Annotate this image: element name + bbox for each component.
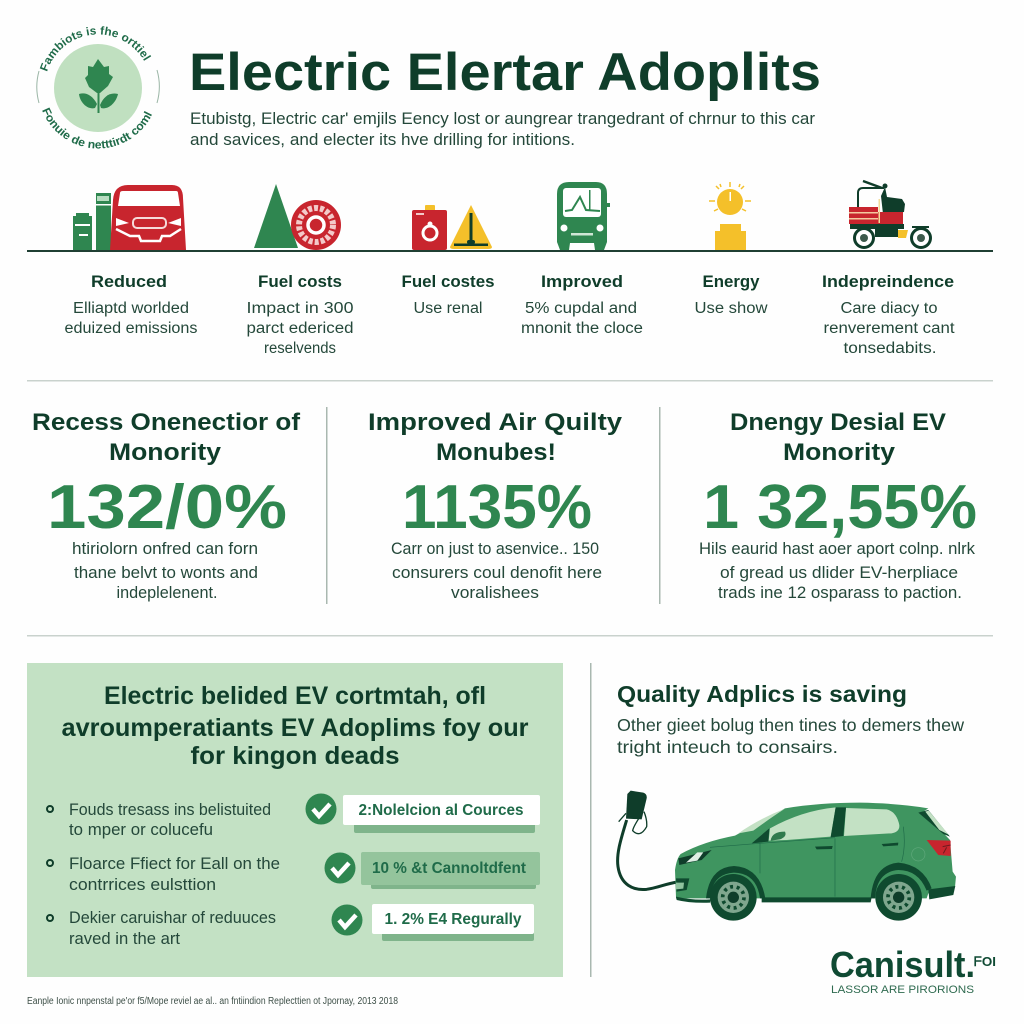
bullet list: raved in the art (69, 930, 180, 948)
car body (675, 803, 956, 898)
benefit: independence: Care diacy to (840, 300, 938, 317)
stat panel: improved air quality: consurers coul denofit here (392, 564, 602, 582)
logo badge: Fambiots is fhe orttiel (40, 26, 152, 72)
icon: green triangle and wheel (254, 184, 341, 250)
brand logo: LASSOR ARE PIRORIONS (831, 984, 974, 996)
panel: green checklist (27, 663, 563, 977)
bullet list: contrrices eulsttion (69, 876, 216, 894)
stat panel: recess (32, 409, 301, 602)
stat panel: energy desial: Monority (783, 439, 896, 466)
benefit: independence: renverement cant (824, 320, 955, 337)
benefit: independence (822, 272, 955, 357)
stat panel: recess: Monority (109, 439, 222, 466)
brand logo: Canisult. (830, 944, 975, 985)
bullet list (47, 801, 280, 948)
intro text (190, 109, 815, 149)
brand logo: ᖴOI (974, 954, 996, 969)
badge: regularly: 1. 2% E4 Regurally (384, 911, 522, 928)
benefit: independence: Indepreindence (822, 272, 954, 291)
benefit: improved: mnonit the cloce (521, 320, 643, 337)
benefit: energy (694, 272, 768, 317)
panel heading (62, 682, 529, 770)
bullet list: Fouds tresass ins belistuited (69, 801, 271, 819)
headlight and tail light (678, 850, 712, 865)
side text: Other gieet bolug then tines to demers thew (617, 715, 964, 735)
badge: cannoltifent (324, 852, 540, 889)
benefit: independence: tonsedabits. (844, 340, 936, 357)
intro text: and savices, and electer its hve drilling for intitions. (190, 130, 575, 149)
car (675, 803, 956, 921)
badge: courses: 2:Nolelcion al Cources (358, 802, 524, 819)
benefit: fuel costes: Use renal (414, 300, 482, 317)
stat panel: improved air quality: Improved Air Quilty (368, 409, 623, 436)
badge: courses (306, 794, 540, 833)
benefit: energy: Energy (702, 272, 760, 291)
stat panel: recess: thane belvt to wonts and (74, 564, 258, 582)
benefit: fuel costs: Impact in 300 (246, 300, 354, 317)
benefit: improved (521, 272, 643, 337)
badge: cannoltifent: 10 % &t Cannoltdfent (372, 860, 526, 877)
side text (617, 715, 964, 757)
benefit: fuel costs: Fuel costs (258, 272, 342, 291)
windows (769, 807, 836, 841)
lower sill (762, 897, 872, 902)
logo badge (36, 26, 160, 149)
stat panel: energy desial: of gread us dlider EV-herpliace (720, 564, 958, 582)
stat panel: improved air quality: Carr on just to asenvice.. 150 (391, 540, 599, 558)
benefit: fuel costs: reselvends (264, 340, 336, 357)
icon: fuel can and warning sign (412, 205, 492, 250)
benefit: fuel costes (402, 272, 494, 317)
icon: energy light (709, 182, 751, 250)
badge: regularly (332, 904, 534, 941)
stat panel: recess: 132/0% (47, 473, 287, 542)
panel heading: for kingon deads (190, 742, 400, 770)
icon: utility cart (849, 181, 930, 248)
stat panel: energy desial (699, 409, 977, 602)
logo badge: Fonuie de netttirdt coml (42, 108, 152, 149)
benefit: energy: Use show (694, 300, 768, 317)
heading: quality adplics: Quality Adplics is saving (617, 681, 907, 707)
benefit: reduced: eduized emissions (64, 320, 198, 337)
benefit: fuel costs: parct edericed (246, 320, 354, 337)
stat panel: recess: htiriolorn onfred can forn (72, 540, 258, 558)
intro text: Etubistg, Electric car' emjils Eency lost or aungrear trangedrant of chrnur to this car (190, 109, 815, 128)
benefit: improved: 5% cupdal and (525, 300, 637, 317)
bullet list: Floarce Ffiect for Eall on the (69, 855, 280, 873)
stat panel: energy desial: Dnengy Desial EV (730, 409, 946, 436)
bullet list: Dekier caruishar of reduuces (69, 909, 276, 927)
panel heading: avroumperatiants EV Adoplims foy our (62, 714, 529, 742)
stat panel: recess: Recess Onenectior of (32, 409, 301, 436)
baseline rule (27, 250, 993, 252)
title: Electric Elertar Adoplits (189, 43, 821, 102)
stat panel: improved air quality: Monubes! (436, 439, 556, 466)
footer source note: Eanple Ionic nnpenstal pe'or f5/Mope reviel ae al.. an fntiindion Replecttien ot Jpornay, 2013 2018 (27, 996, 398, 1007)
illustration: charging car (618, 791, 956, 921)
stat panel: energy desial: trads ine 12 osparass to paction. (718, 584, 962, 602)
side text: tright inteuch to consairs. (617, 737, 838, 757)
benefit: reduced: Reduced (91, 272, 167, 291)
benefit: reduced (64, 272, 198, 337)
stat panel: improved air quality: voralishees (451, 584, 539, 602)
panel heading: Electric belided EV cortmtah, ofl (104, 682, 486, 710)
stat panel: recess: indeplelenent. (116, 584, 218, 602)
benefit: fuel costs (246, 272, 354, 357)
benefit: improved: Improved (541, 272, 623, 291)
stat panel: energy desial: Hils eaurid hast aoer aport colnp. nlrk (699, 540, 976, 558)
stat panel: improved air quality: 1135% (402, 473, 592, 542)
mirror, handles, door lines (771, 832, 786, 841)
benefit: fuel costes: Fuel costes (402, 272, 494, 291)
bullet list: to mper or colucefu (69, 821, 213, 839)
stat panel: improved air quality (368, 409, 623, 602)
icon: green bus (557, 182, 610, 250)
icon: batteries and red car (73, 185, 186, 250)
benefit: reduced: Elliaptd worlded (73, 300, 189, 317)
charging cable and plug (618, 791, 677, 890)
wheels and arches (706, 866, 765, 898)
stat panel: energy desial: 1 32,55% (703, 473, 977, 542)
